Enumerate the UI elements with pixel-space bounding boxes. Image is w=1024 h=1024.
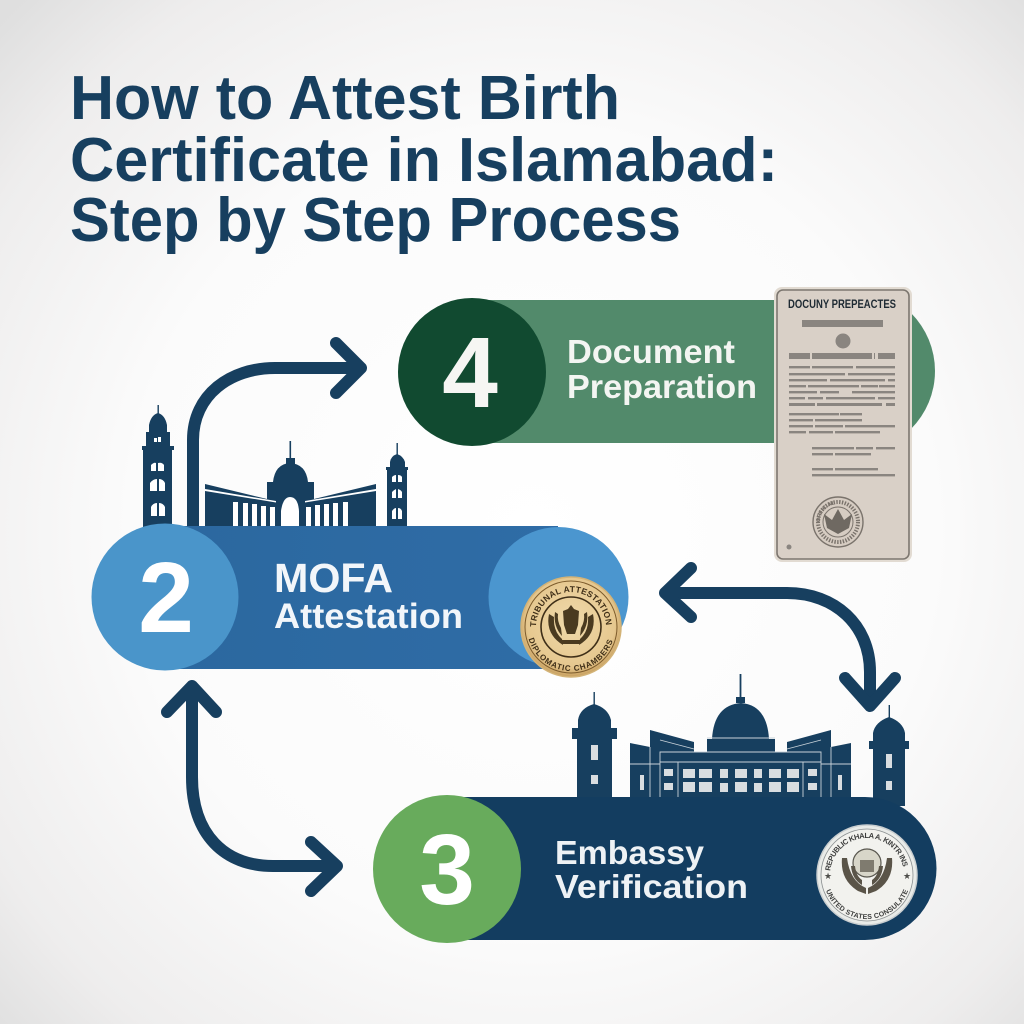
document stamp: OFFICIAL — [816, 500, 836, 522]
step 4 bar — [472, 289, 935, 453]
panel: step 2 MOFA attestation — [92, 524, 628, 678]
step 4 circle — [398, 298, 546, 446]
step 3 label — [555, 834, 748, 905]
panel: step 4 document preparation — [398, 289, 935, 453]
icon: document certificate — [774, 287, 912, 562]
arrow: MOFA to document preparation — [193, 343, 361, 528]
step 2 label — [274, 555, 463, 636]
step 2 bar — [165, 526, 558, 669]
step 3 label: Verification — [555, 868, 748, 905]
left embassy tower — [572, 692, 617, 798]
title — [70, 64, 778, 255]
arrow: embassy and MOFA two-way — [665, 568, 895, 706]
step 4 number: 4 — [442, 317, 498, 429]
step 2 label: MOFA — [274, 555, 393, 601]
central palace — [205, 441, 376, 527]
left tower — [142, 405, 174, 527]
building: MOFA skyline — [142, 405, 408, 527]
right tower — [386, 443, 408, 527]
step 3 label: Embassy — [555, 834, 705, 871]
step 4 label — [567, 333, 757, 405]
title: Certificate in Islamabad: — [70, 126, 778, 195]
central embassy hall — [630, 674, 851, 798]
step 4 label: Document — [567, 333, 735, 370]
icon: white embassy seal: REPUBLIC KHALA A. KINTR INS — [825, 832, 908, 870]
step 4 label: Preparation — [567, 368, 757, 405]
step 3 bar — [447, 797, 936, 940]
building: embassy skyline — [572, 674, 909, 806]
title: How to Attest Birth — [70, 64, 620, 133]
panel: step 3 embassy verification — [373, 795, 936, 943]
step 2 number: 2 — [138, 542, 194, 654]
icon: white embassy seal: ★ — [824, 871, 832, 881]
right embassy tower — [869, 705, 909, 806]
step 3 number: 3 — [419, 814, 475, 926]
arrow: MOFA and embassy verification two-way — [167, 686, 337, 891]
step 2 circle — [92, 524, 238, 670]
step 2 right cap — [488, 527, 628, 667]
title: Step by Step Process — [70, 186, 681, 255]
step 2 label: Attestation — [274, 597, 463, 636]
icon: gold seal: TRIBUNAL ATTESTATION — [530, 586, 612, 626]
icon: gold seal — [520, 576, 622, 678]
document text lines — [786, 320, 895, 550]
document heading: DOCUNY PREPEACTES — [788, 297, 896, 311]
icon: gold seal: DIPLOMATIC CHAMBERS — [528, 638, 612, 671]
icon: white embassy seal: ★ — [903, 871, 911, 881]
document stamp — [812, 496, 864, 548]
icon: white embassy seal — [816, 824, 918, 926]
icon: white embassy seal: UNITED STATES CONSULATE — [826, 889, 908, 920]
step 3 circle — [373, 795, 521, 943]
